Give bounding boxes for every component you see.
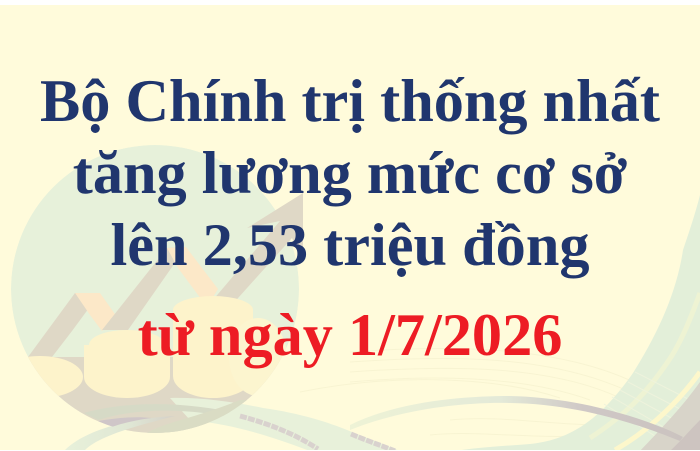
- cream stripe: [615, 372, 700, 450]
- date line: từ ngày 1/7/2026: [138, 302, 562, 369]
- lower green band: [170, 398, 400, 451]
- icon: coin stacks: [28, 296, 286, 398]
- faint wave lines: [300, 348, 640, 436]
- grey corner: [640, 382, 700, 451]
- decorative waves: [65, 195, 700, 451]
- title: [40, 68, 660, 279]
- mauve corner: [670, 420, 700, 451]
- icon: rising arrow: [28, 193, 303, 357]
- lower ground band: [54, 357, 261, 433]
- title line 2: tăng lương mức cơ sở: [73, 140, 627, 207]
- mauve swoosh: [350, 396, 683, 441]
- circle fill: [11, 145, 299, 357]
- title line 1: Bộ Chính trị thống nhất: [40, 68, 660, 135]
- pale stripe in green band: [590, 293, 700, 438]
- right green band: [455, 195, 700, 451]
- title line 3: lên 2,53 triệu đồng: [110, 212, 590, 279]
- lower left swoosh: [65, 416, 175, 450]
- circle overlay arcs: [85, 401, 246, 433]
- decorative circle with chart and coins: [11, 145, 303, 433]
- grey dashes on band: [240, 416, 318, 449]
- light line pattern on band: [604, 372, 690, 436]
